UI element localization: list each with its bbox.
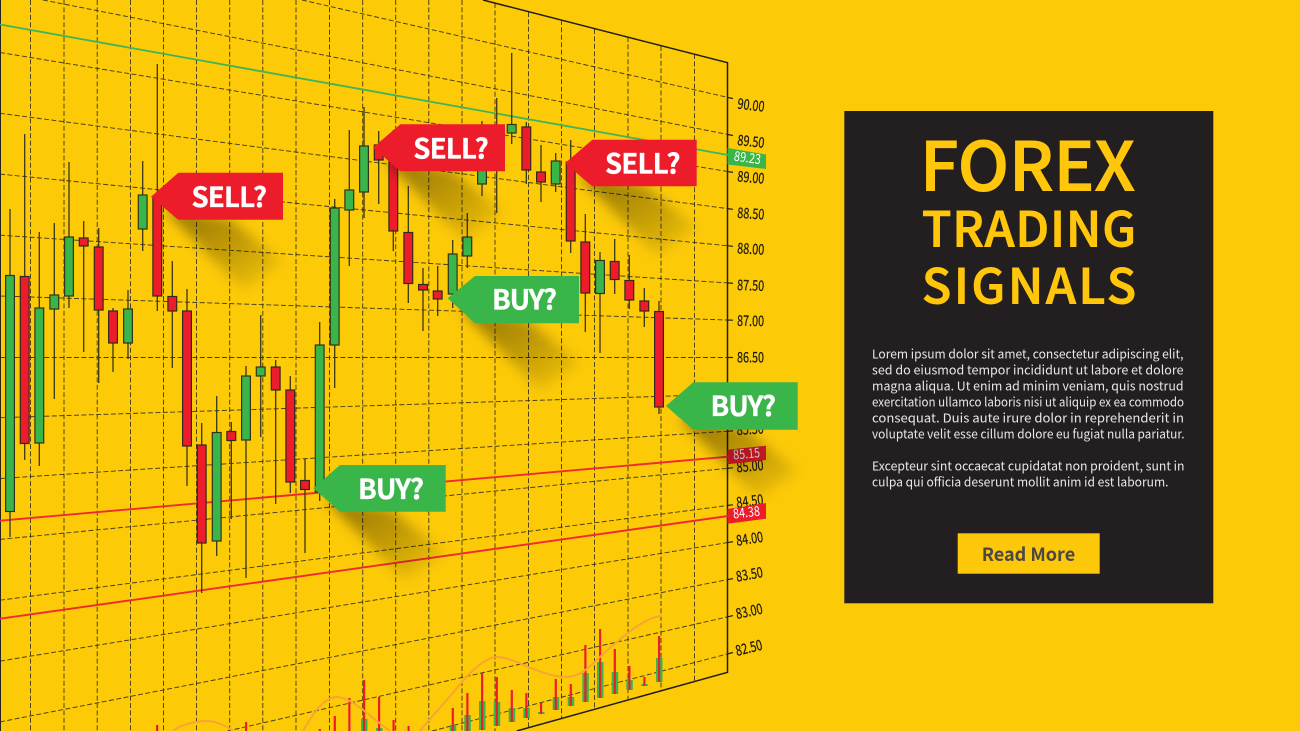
callout: BUY? centre	[448, 276, 579, 323]
body text: Lorem ipsum dolor sit amet, consectetur adipiscing elit,	[872, 344, 1184, 362]
body text	[872, 344, 1184, 490]
callout: BUY? centre: BUY?	[492, 278, 557, 318]
price axis labels: 87.50	[737, 274, 765, 296]
price axis labels: 89.00	[737, 165, 765, 189]
price axis labels: 85.50	[736, 417, 764, 440]
title: FOREX	[920, 113, 1135, 210]
price axis labels: 83.50	[734, 561, 764, 587]
title	[920, 113, 1136, 318]
price axis labels: 88.50	[737, 202, 765, 225]
body text: consequat. Duis aute irure dolor in reprehenderit in	[872, 408, 1184, 426]
body text: exercitation ullamco laboris nisi ut aliquip ex ea commodo	[872, 392, 1184, 410]
volume moving average curve	[173, 616, 662, 731]
price axis labels: 88.00	[737, 237, 765, 260]
price axis labels: 86.50	[737, 346, 764, 367]
callout: BUY? lower left: BUY?	[358, 467, 424, 507]
body text: Excepteur sint occaecat cupidatat non proident, sunt in	[872, 456, 1184, 474]
callout: SELL? left: SELL?	[192, 175, 267, 215]
price tag: 89.23: 89.23	[733, 145, 762, 168]
callout: BUY? right: BUY?	[710, 384, 776, 424]
support trend line: upper red	[0, 457, 728, 521]
title: SIGNALS	[922, 248, 1136, 318]
button: read more	[958, 533, 1100, 574]
chart left edge	[0, 0, 1, 731]
price axis labels: 89.50	[736, 129, 766, 153]
callout: SELL? centre	[373, 124, 505, 171]
body text: sed do eiusmod tempor incididunt ut labore et dolore	[872, 360, 1184, 378]
title: TRADING	[922, 190, 1136, 260]
price axis labels: 90.00	[736, 93, 766, 117]
panel: forex trading signals	[844, 111, 1213, 603]
resistance trend line: green	[0, 24, 728, 155]
price axis labels: 85.00	[736, 454, 764, 477]
price axis labels: 86.00	[736, 382, 764, 404]
price axis labels: 87.00	[737, 310, 764, 331]
price tag: 84.38: 84.38	[732, 500, 761, 522]
price axis labels: 82.50	[733, 634, 764, 661]
body text: culpa qui officia deserunt mollit anim id est laborum.	[872, 472, 1168, 490]
callout: BUY? right	[666, 382, 798, 430]
price axis labels: 84.00	[735, 526, 764, 551]
callout: SELL? centre: SELL?	[413, 126, 489, 166]
price axis labels	[727, 93, 766, 661]
chart frame and price axis line	[483, 0, 728, 731]
price tag: 85.15: 85.15	[732, 441, 761, 463]
button: read more: Read More	[982, 541, 1075, 567]
callout: SELL? right	[565, 140, 697, 186]
perspective chart grid	[0, 0, 733, 731]
price axis labels: 84.50	[735, 489, 764, 513]
callout: SELL? left	[151, 173, 283, 220]
callout: SELL? right: SELL?	[605, 142, 680, 182]
callout: BUY? lower left	[313, 465, 446, 512]
candlestick series	[6, 53, 663, 593]
volume bars	[156, 629, 662, 731]
label shadows	[163, 159, 798, 581]
body text: magna aliqua. Ut enim ad minim veniam, quis nostrud	[872, 376, 1184, 394]
support trend line: lower red	[0, 516, 728, 619]
price axis labels: 83.00	[734, 598, 764, 624]
body text: voluptate velit esse cillum dolore eu fugiat nulla pariatur.	[872, 424, 1184, 442]
